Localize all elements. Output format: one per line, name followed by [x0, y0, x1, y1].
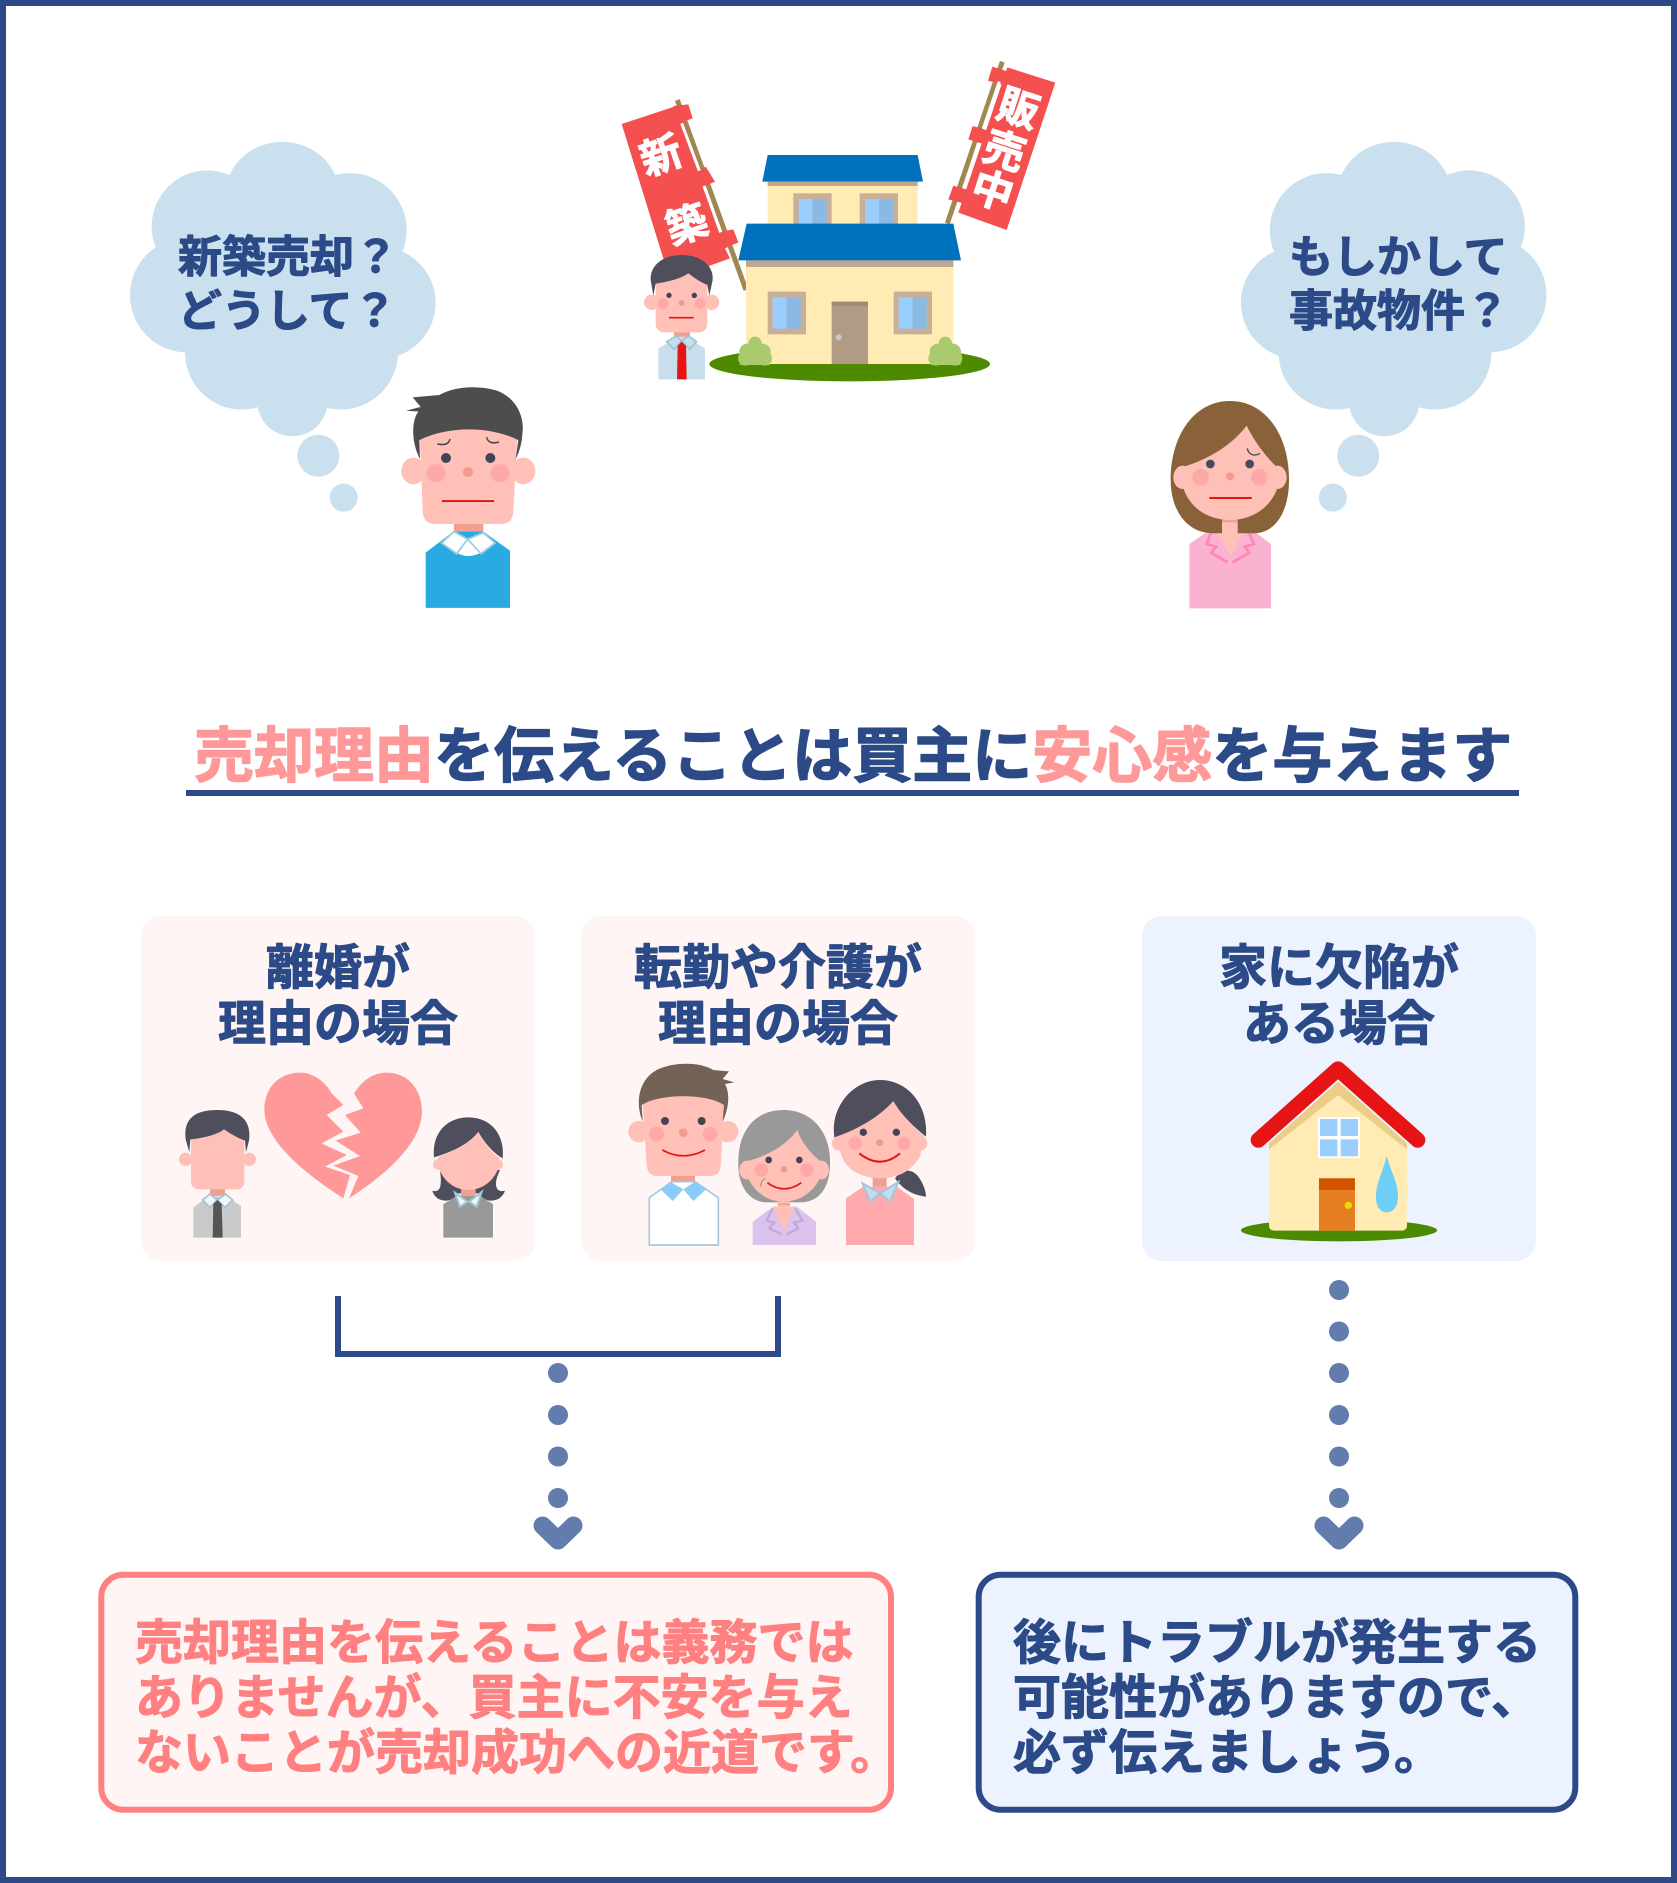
callout: right conclusion: 可能性がありますので、 [1013, 1672, 1539, 1725]
panel: house defect [1142, 916, 1536, 1261]
heading: house defect: ある場合 [1243, 998, 1435, 1051]
callout: right conclusion [979, 1575, 1575, 1810]
title: 売却理由を伝えることは買主に安心感を与えます [194, 723, 1512, 790]
icon: family of three [628, 1064, 927, 1245]
callout: right conclusion: 必ず伝えましょう。 [1013, 1727, 1442, 1780]
flag: for sale [947, 62, 1055, 230]
callout: right conclusion: 後にトラブルが発生する [1013, 1617, 1541, 1670]
house [709, 155, 990, 381]
arrow: right dotted [1324, 1280, 1354, 1540]
heading: divorce: 離婚が [266, 942, 410, 995]
panel: job transfer or nursing care [581, 916, 975, 1261]
flag: shinchiku: 築 [660, 197, 714, 254]
thought bubble: left: どうして？ [178, 287, 397, 336]
bracket connector [338, 1296, 778, 1354]
callout: left conclusion: 売却理由を伝えることは義務では [135, 1617, 854, 1670]
icon: broken heart and couple [179, 1073, 505, 1238]
panel: divorce [141, 916, 535, 1261]
thought bubble: right: 事故物件？ [1289, 287, 1509, 336]
icon: house with water leak [1241, 1069, 1437, 1241]
flag: for sale: 売 [978, 123, 1031, 180]
thought bubble: left [130, 142, 436, 512]
flag: shinchiku: 新 [634, 128, 688, 185]
icon: salesman with new house and sale flags [622, 62, 1055, 381]
flag: for sale: 中 [966, 163, 1019, 220]
salesman [644, 255, 719, 379]
icon: worried man [401, 387, 535, 608]
callout: left conclusion: ないことが売却成功への近道です。 [135, 1727, 898, 1780]
thought bubble: left: 新築売却？ [178, 233, 398, 282]
callout: left conclusion [101, 1575, 898, 1810]
flag: shinchiku [622, 100, 746, 290]
thought bubble: right [1241, 142, 1547, 512]
heading: divorce: 理由の場合 [218, 998, 458, 1051]
arrow: left dotted [542, 1363, 574, 1540]
heading: house defect: 家に欠陥が [1219, 942, 1459, 995]
thought bubble: right: もしかして [1289, 233, 1508, 282]
heading: job transfer or nursing care: 理由の場合 [658, 998, 898, 1051]
icon: worried woman [1171, 401, 1289, 608]
callout: left conclusion: ありませんが、買主に不安を与え [135, 1672, 853, 1725]
flag: for sale: 販 [992, 81, 1045, 137]
heading: job transfer or nursing care: 転勤や介護が [634, 942, 922, 995]
